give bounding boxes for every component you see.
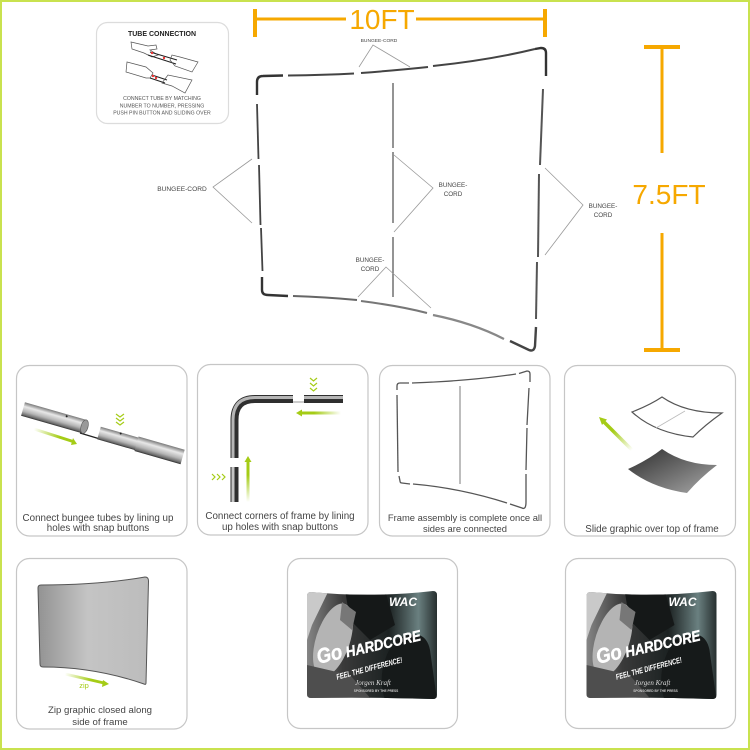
callout: right bungee cord bbox=[545, 168, 617, 255]
illustration: zipped sheet bbox=[38, 577, 148, 684]
panel: zip graphic bbox=[16, 558, 187, 729]
callout: top bungee cord bbox=[359, 38, 410, 67]
frame: right edge bbox=[510, 89, 543, 350]
panel: slide graphic bbox=[564, 366, 736, 536]
illustration: assembled frame bbox=[397, 371, 530, 508]
icon: hands connecting tubes bbox=[126, 42, 198, 93]
frame: left edge bbox=[257, 104, 288, 296]
banner tagline: FEEL THE DIFFERENCE! bbox=[335, 655, 404, 682]
illustration: bungee tubes bbox=[21, 402, 185, 464]
callout: top bungee cord: BUNGEE-CORD bbox=[361, 38, 398, 44]
text: tube connection instructions: NUMBER TO NUMBER, PRESSING bbox=[120, 104, 204, 110]
text: tube connection instructions bbox=[113, 96, 211, 116]
illustration: wire frame bbox=[632, 397, 722, 437]
caption bbox=[48, 705, 152, 728]
dimension: 10FT width bbox=[255, 4, 545, 37]
illustration: printed banner bbox=[584, 588, 720, 702]
banner signature: Jorgen Kraft bbox=[355, 679, 392, 687]
banner headline: Go HARDCORE bbox=[594, 622, 703, 669]
caption: up holes with snap buttons bbox=[222, 522, 338, 533]
frame: centre pole bbox=[392, 83, 394, 297]
frame: top edge bbox=[257, 48, 546, 95]
callout: bottom bungee cord: CORD bbox=[361, 266, 380, 273]
callout: left bungee cord bbox=[157, 159, 252, 223]
panel: frame complete bbox=[380, 366, 550, 536]
callout: left bungee cord: BUNGEE-CORD bbox=[157, 186, 207, 193]
illustration: corner tube bbox=[233, 398, 343, 502]
callout: centre bungee cord: CORD bbox=[444, 191, 463, 198]
arrow: zip direction bbox=[65, 674, 109, 687]
arrow: slide up-left bbox=[599, 417, 632, 450]
panel: finished display front bbox=[288, 558, 458, 728]
banner headline: Go HARDCORE bbox=[314, 622, 424, 669]
callout: right bungee cord: CORD bbox=[594, 212, 613, 219]
banner tagline: FEEL THE DIFFERENCE! bbox=[615, 655, 683, 682]
panel: finished display back bbox=[566, 558, 736, 728]
dimension: 7.5FT height: 7.5FT bbox=[632, 179, 706, 210]
arrow: slide right bbox=[34, 429, 77, 445]
caption bbox=[205, 511, 355, 533]
callout: right bungee cord: BUNGEE- bbox=[589, 203, 617, 210]
dimension: 7.5FT height bbox=[632, 47, 706, 350]
callout: centre bungee cord bbox=[394, 155, 467, 232]
dimension: 10FT width: 10FT bbox=[349, 4, 415, 35]
caption: Connect corners of frame by lining bbox=[205, 511, 355, 522]
caption: Frame assembly is complete once all bbox=[388, 512, 542, 523]
caption: Slide graphic over top of frame bbox=[585, 524, 719, 535]
panel: connect bungee tubes bbox=[16, 366, 187, 536]
callout: bottom bungee cord bbox=[356, 257, 431, 308]
icon: snap chevrons bbox=[116, 414, 124, 425]
banner small print: SPONSORED BY THE PRESS bbox=[633, 689, 678, 693]
illustration: graphic sheet bbox=[628, 449, 717, 493]
caption bbox=[23, 513, 174, 534]
frame: bottom edge bbox=[293, 296, 357, 300]
caption bbox=[388, 512, 542, 534]
label: zip: zip bbox=[79, 681, 89, 690]
arrow: slide left bbox=[296, 410, 341, 416]
callout: bottom bungee cord: BUNGEE- bbox=[356, 257, 384, 264]
arrow: slide up bbox=[244, 456, 252, 502]
callout: centre bungee cord: BUNGEE- bbox=[439, 182, 467, 189]
illustration: printed banner bbox=[305, 588, 440, 702]
panel: tube connection bbox=[96, 22, 228, 124]
diagram: main frame bbox=[257, 48, 546, 350]
heading: tube connection: TUBE CONNECTION bbox=[128, 31, 196, 38]
banner logo: WAC bbox=[389, 595, 417, 609]
banner logo: WAC bbox=[668, 595, 697, 609]
text: tube connection instructions: PUSH PIN BUTTON AND SLIDING OVER bbox=[113, 110, 211, 116]
text: tube connection instructions: CONNECT TUBE BY MATCHING bbox=[123, 96, 201, 102]
caption: side of frame bbox=[72, 717, 128, 728]
banner signature: Jorgen Kraft bbox=[635, 679, 671, 687]
caption: holes with snap buttons bbox=[47, 523, 149, 534]
caption: Connect bungee tubes by lining up bbox=[23, 513, 174, 524]
caption: Zip graphic closed along bbox=[48, 705, 152, 716]
icon: left chevrons bbox=[212, 474, 225, 480]
banner small print: SPONSORED BY THE PRESS bbox=[354, 689, 398, 693]
panel: connect corners bbox=[198, 364, 368, 535]
caption: sides are connected bbox=[423, 523, 507, 534]
icon: top chevrons bbox=[310, 378, 317, 391]
